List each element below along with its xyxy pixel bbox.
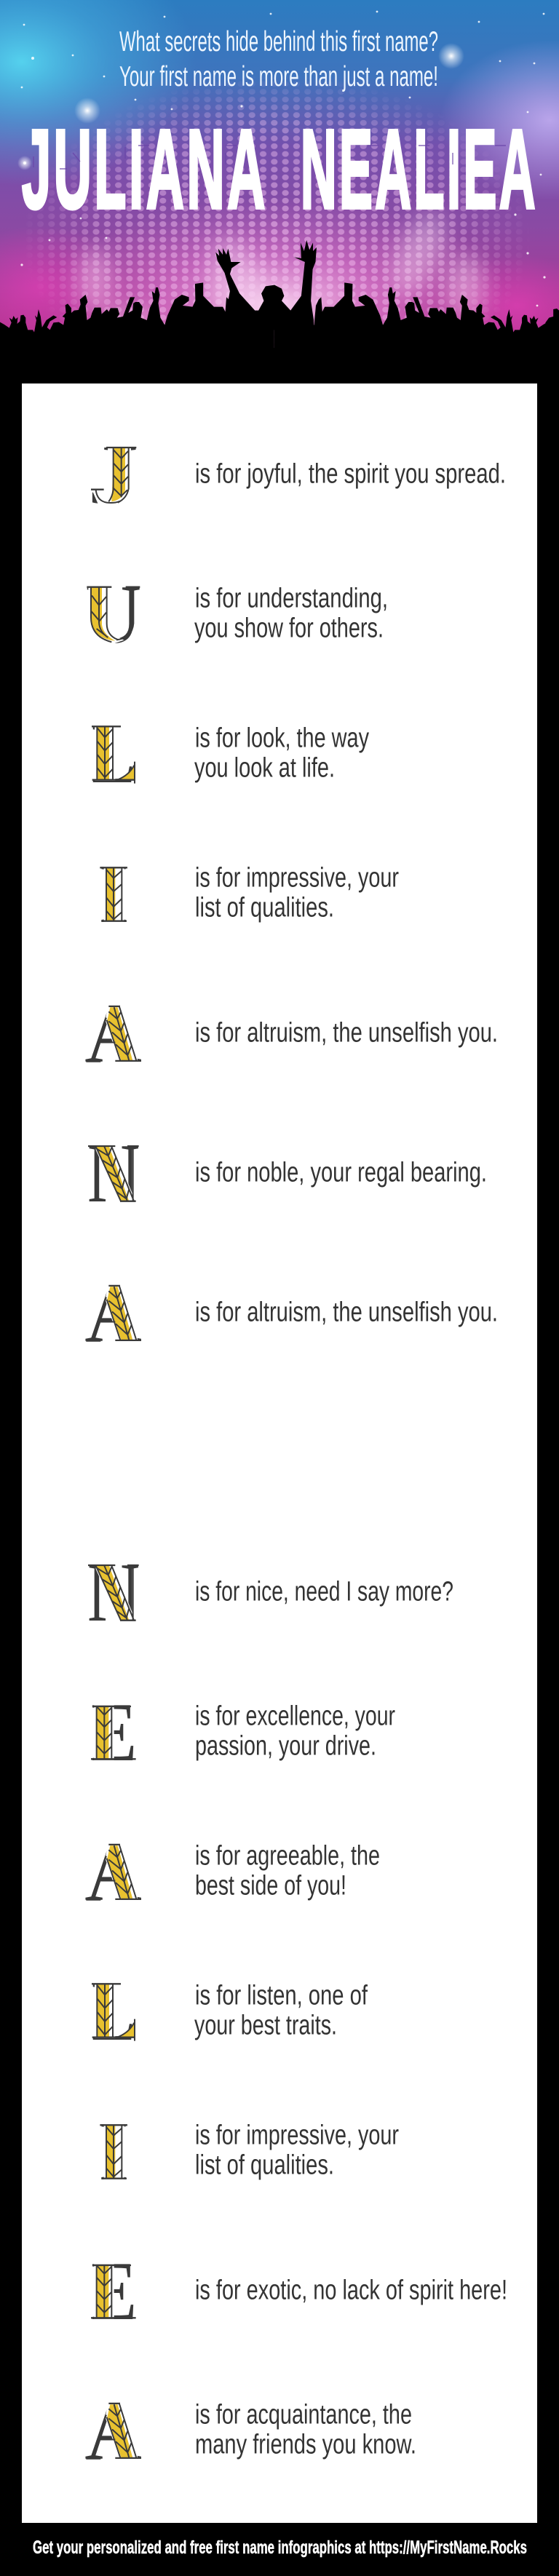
row: A <box>84 2385 416 2478</box>
letter A: A <box>84 1826 142 1919</box>
row: A <box>84 1826 380 1919</box>
row: L <box>91 1964 368 2058</box>
text: list of qualities. <box>195 892 334 923</box>
text <box>195 1841 380 1901</box>
grunge marks on name <box>33 146 506 169</box>
letter I: I <box>98 2104 129 2198</box>
row: U <box>86 568 388 661</box>
subtitle text <box>119 26 438 92</box>
row: E <box>90 1686 395 1779</box>
letter A: A <box>84 2385 142 2478</box>
text: is for acquaintance, the <box>195 2400 412 2430</box>
letter E: E <box>90 2245 137 2338</box>
text: best side of you! <box>195 1870 346 1901</box>
row: A <box>84 1267 498 1360</box>
text: is for understanding, <box>195 584 388 614</box>
text: is for impressive, your <box>195 863 399 894</box>
text: your best traits. <box>194 2010 337 2040</box>
text: is for look, the way <box>195 723 369 754</box>
panel: white content card <box>22 383 537 2523</box>
text <box>194 584 388 643</box>
letter E: E <box>90 1686 137 1779</box>
name title: JULIANA <box>22 106 268 231</box>
row: N <box>87 1126 487 1220</box>
text <box>195 863 399 923</box>
text: you show for others. <box>194 613 384 643</box>
text: is for nice, need I say more? <box>195 1576 453 1607</box>
letter A: A <box>84 1267 142 1360</box>
row: E <box>90 2245 507 2338</box>
letter I: I <box>98 847 129 941</box>
text <box>194 1981 368 2040</box>
letter U: U <box>86 568 141 661</box>
text <box>194 723 369 783</box>
row: I <box>98 2104 399 2198</box>
row: J <box>90 427 506 521</box>
header: concert background <box>0 0 559 348</box>
text: passion, your drive. <box>195 1730 376 1761</box>
crowd silhouette <box>0 240 559 351</box>
letter N: N <box>87 1126 140 1220</box>
row: N <box>87 1546 453 1639</box>
row: L <box>91 707 369 800</box>
text <box>195 1701 395 1761</box>
text: you look at life. <box>194 752 335 783</box>
row: A <box>84 987 498 1081</box>
row: I <box>98 847 399 941</box>
letter L: L <box>91 707 136 800</box>
letter A: A <box>84 987 142 1081</box>
text: is for listen, one of <box>195 1981 368 2011</box>
text: many friends you know. <box>195 2429 416 2460</box>
letter N: N <box>87 1546 140 1639</box>
text <box>195 2120 399 2180</box>
text: list of qualities. <box>195 2150 334 2180</box>
text: is for agreeable, the <box>195 1841 380 1872</box>
text: is for impressive, your <box>195 2120 399 2151</box>
text: is for excellence, your <box>195 1701 395 1732</box>
letter L: L <box>91 1964 136 2058</box>
letter J: J <box>90 427 138 521</box>
text <box>195 2400 416 2460</box>
